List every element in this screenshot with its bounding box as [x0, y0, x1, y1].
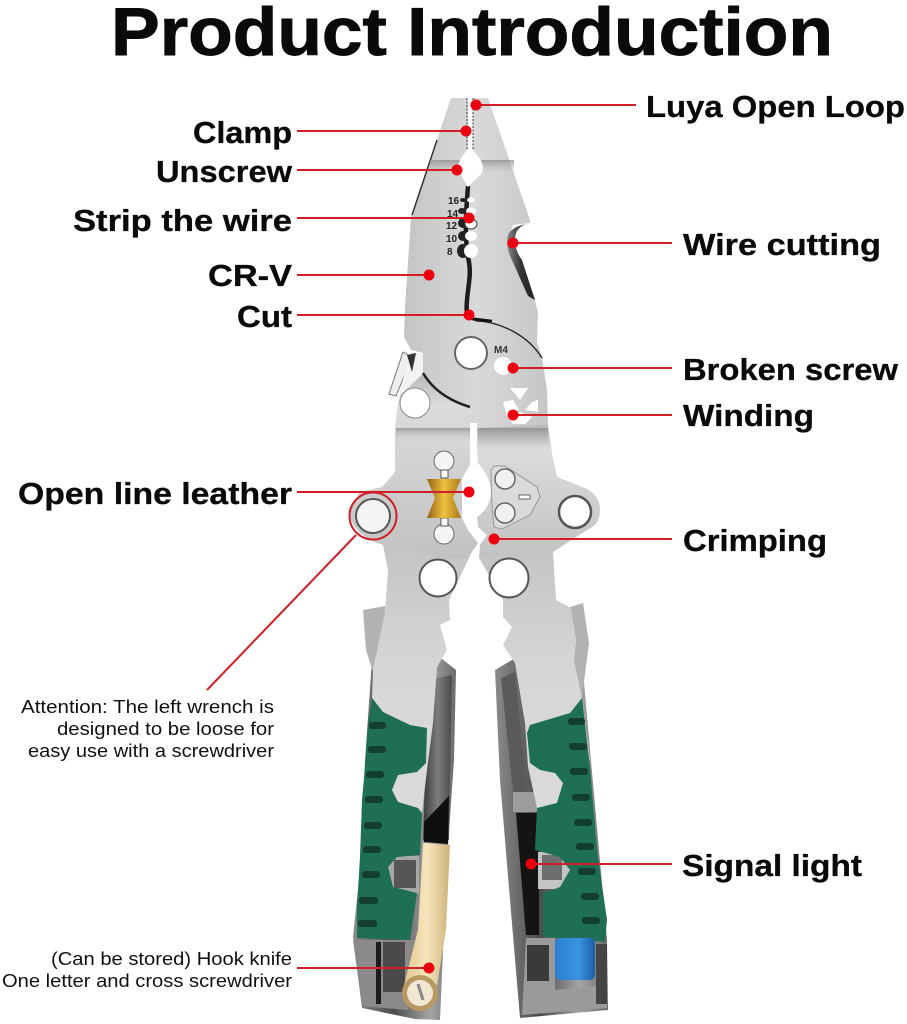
gold thumbwheel [427, 451, 461, 544]
jaw slit [468, 98, 473, 150]
right lobe hole [559, 496, 591, 528]
upper jaw [404, 98, 548, 428]
left lobe hole [356, 499, 390, 533]
left lower window block [387, 856, 419, 894]
right steel arm [478, 552, 590, 808]
label: Cut: Cut [237, 299, 292, 334]
band shading [430, 160, 514, 174]
wire notch [507, 224, 535, 300]
left grip [357, 698, 427, 940]
gauge numbers: 12 [446, 221, 458, 232]
jaw cutting line [466, 186, 470, 316]
label: Winding: Winding [683, 398, 814, 433]
crimping cutout [462, 423, 491, 557]
right lower window block [538, 852, 572, 889]
label: Strip the wire: Strip the wire [73, 203, 292, 238]
curved pivot groove [423, 373, 470, 407]
label: Unscrew: Unscrew [156, 154, 293, 189]
pliers illustration [348, 98, 608, 1020]
grip ribs [358, 718, 600, 927]
storage note [2, 949, 292, 991]
label: Signal light: Signal light [682, 848, 862, 883]
unscrew hole [458, 150, 483, 187]
right lower plate [476, 425, 600, 557]
lever pin [400, 388, 430, 418]
right grip [527, 698, 607, 942]
attention note [21, 697, 274, 761]
gauge numbers: 16 [448, 196, 460, 207]
gauge numbers: 10 [446, 234, 458, 245]
right handle frame [495, 657, 608, 1018]
lock lever [389, 352, 427, 396]
jaw left edge [412, 140, 437, 215]
callout lines and dots [207, 100, 672, 974]
winding holes [503, 388, 538, 424]
storage note: One letter and cross screwdriver [2, 971, 292, 991]
wire gauge holes [457, 198, 478, 258]
label: Luya Open Loop: Luya Open Loop [646, 89, 905, 124]
storage note: (Can be stored) Hook knife [51, 949, 292, 969]
crimp plate [491, 466, 540, 529]
label: Open line leather: Open line leather [18, 476, 292, 511]
attention note: designed to be loose for [57, 719, 274, 739]
attention note: easy use with a screwdriver [28, 741, 274, 761]
gauge numbers: 8 [447, 247, 453, 258]
gauge numbers: 14 [447, 209, 459, 220]
blue battery [555, 938, 595, 980]
label: Clamp: Clamp [193, 115, 292, 150]
left lower plate [348, 372, 478, 558]
M4 label: M4 [494, 345, 508, 356]
left handle frame [353, 655, 456, 1020]
screwdriver [402, 843, 450, 1011]
label: Wire cutting: Wire cutting [683, 227, 881, 262]
label: Broken screw: Broken screw [683, 352, 899, 387]
label: CR-V: CR-V [208, 258, 292, 293]
label: Crimping: Crimping [683, 523, 827, 558]
attention note: Attention: The left wrench is [21, 697, 274, 717]
right sleeve [570, 603, 589, 697]
left sleeve [363, 606, 385, 672]
left steel arm [372, 545, 470, 813]
lower round holes [420, 560, 456, 596]
pivot hole [455, 337, 487, 369]
gauge numbers [446, 196, 460, 258]
broken screw hole [494, 357, 512, 375]
